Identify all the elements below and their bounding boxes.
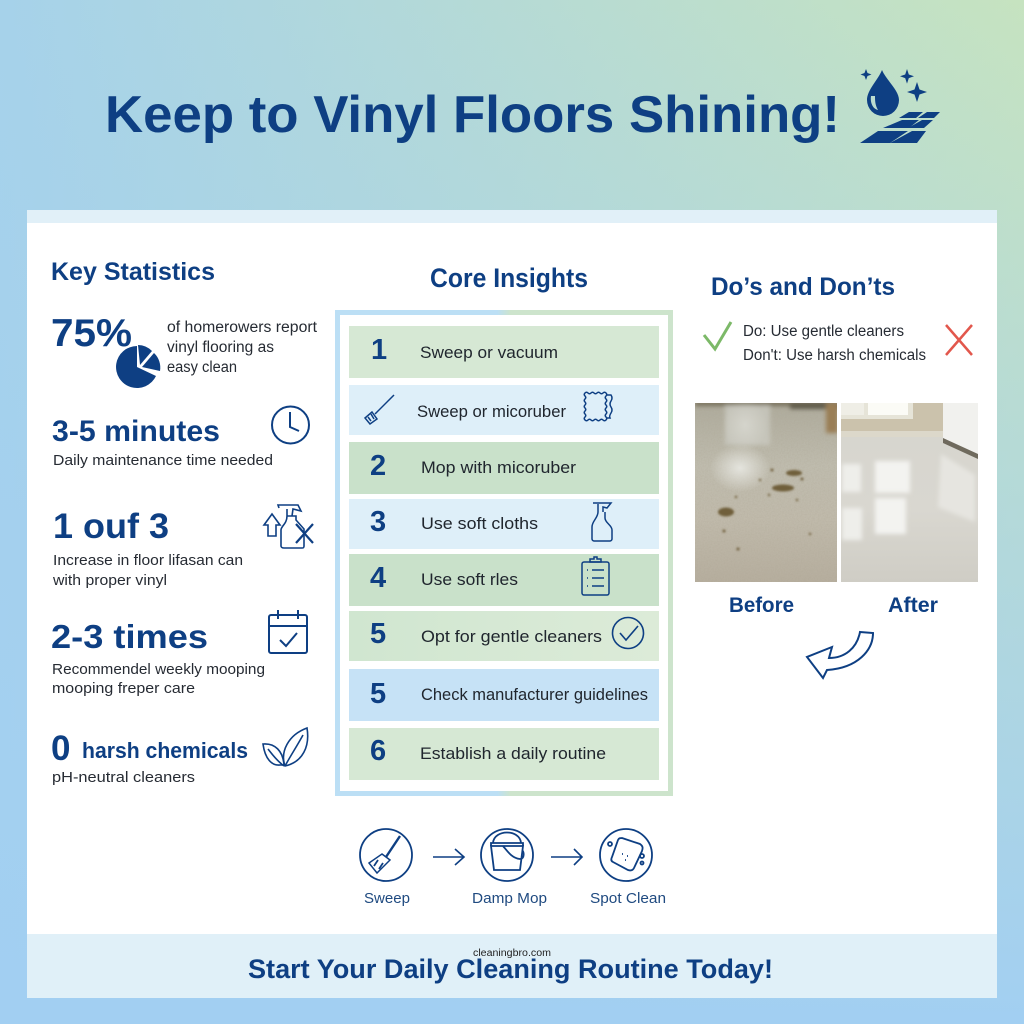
row 4: use soft cloths — [349, 499, 659, 549]
arrow: curved back arrow — [807, 632, 873, 678]
row 8: establish a daily routine — [349, 728, 659, 780]
stat: 0 harsh chemicals: pH-neutral cleaners — [52, 770, 195, 786]
row 3: mop with micoruber: Mop with micoruber — [421, 458, 576, 477]
stat: 75 percent: vinyl flooring as — [167, 339, 274, 356]
photo: before (dirty floor) — [695, 399, 840, 582]
stat: 0 harsh chemicals — [51, 728, 308, 786]
stat: 2-3 times — [51, 610, 307, 697]
icon: green check — [704, 322, 731, 349]
title: Keep to Vinyl Floors Shining! — [105, 86, 840, 144]
stat: 75 percent: 75% — [51, 312, 132, 355]
icon: clock — [272, 406, 309, 444]
row 5: use soft files: Use soft rles — [421, 570, 518, 589]
stat: 3-5 minutes — [52, 406, 309, 469]
stat: 75 percent: easy clean — [167, 359, 237, 376]
stat: 0 harsh chemicals: harsh chemicals — [82, 738, 248, 763]
stat: 2-3 times: mooping freper care — [52, 681, 195, 697]
insights frame — [338, 312, 670, 794]
panel: core insights — [338, 263, 670, 794]
photo: after (shiny floor) — [841, 403, 978, 582]
icon: calendar — [269, 610, 307, 653]
icon: check circle — [612, 618, 644, 648]
process flow — [360, 829, 666, 907]
row 7: check manufacturer guidelines: 5 — [370, 678, 386, 710]
arrow: damp mop to spot clean — [551, 849, 582, 865]
step: damp mop — [472, 829, 547, 907]
stat: 1 of 3: with proper vinyl — [52, 573, 167, 589]
row 4: use soft cloths: Use soft cloths — [421, 514, 538, 533]
stat: 1 of 3: 1 ouf 3 — [53, 507, 169, 546]
row 8: establish a daily routine: 6 — [370, 735, 386, 767]
row 3: mop with micoruber: 2 — [370, 450, 386, 482]
icon: clipboard — [582, 557, 609, 595]
row 7: check manufacturer guidelines: Check manufacturer guidelines — [421, 685, 648, 704]
stat: 3-5 minutes: 3-5 minutes — [52, 415, 220, 448]
icon: water drop with sparkles and floor tiles — [860, 69, 940, 143]
heading: key statistics: Key Statistics — [51, 258, 215, 286]
footer call to action: Start Your Daily Cleaning Routine Today! — [248, 954, 773, 984]
stat: 1 of 3 — [52, 505, 313, 589]
icon: spray bottle — [592, 503, 612, 541]
step: sweep — [360, 829, 412, 907]
do text: Do: Use gentle cleaners — [743, 323, 904, 340]
row 1: sweep or vacuum: Sweep or vacuum — [420, 343, 558, 362]
icon: red cross — [946, 325, 972, 355]
icon: leaves — [263, 728, 308, 766]
stat: 75 percent — [51, 312, 318, 388]
row 5: use soft files — [349, 554, 659, 606]
main white panel — [27, 210, 997, 998]
panel: do's and don'ts — [704, 273, 972, 364]
icon: spray bottle with arrow and cross — [264, 505, 313, 548]
stat: 2-3 times: 2-3 times — [51, 618, 208, 655]
step: sweep: Sweep — [364, 890, 410, 907]
heading: do's and don'ts: Do’s and Don’ts — [711, 273, 895, 301]
label: after: After — [888, 594, 938, 617]
row 7: check manufacturer guidelines — [349, 669, 659, 721]
row 6: opt for gentle cleaners: 5 — [370, 618, 386, 650]
label: before: Before — [729, 594, 794, 617]
footer band — [27, 934, 997, 998]
row 1: sweep or vacuum: 1 — [371, 334, 387, 366]
panel: key statistics — [51, 258, 318, 786]
step: damp mop: Damp Mop — [472, 890, 547, 907]
stat: 3-5 minutes: Daily maintenance time needed — [53, 453, 273, 469]
stat: 2-3 times: Recommendel weekly mooping — [52, 662, 265, 678]
row 6: opt for gentle cleaners — [349, 611, 659, 661]
icon: pie chart — [116, 345, 160, 388]
icon: microfiber cloth — [584, 392, 612, 421]
heading: core insights: Core Insights — [430, 263, 588, 293]
row 1: sweep or vacuum — [349, 326, 659, 378]
stat: 75 percent: of homerowers report — [167, 319, 318, 336]
row 8: establish a daily routine: Establish a daily routine — [420, 744, 606, 763]
stat: 0 harsh chemicals: 0 — [51, 729, 70, 768]
step: spot clean: Spot Clean — [590, 890, 666, 907]
icon: broom — [365, 395, 394, 424]
arrow: sweep to damp mop — [433, 849, 464, 865]
row 4: use soft cloths: 3 — [370, 506, 386, 538]
row 3: mop with micoruber — [349, 442, 659, 494]
step: spot clean — [590, 829, 666, 907]
watermark: cleaningbro.com — [473, 948, 551, 959]
row 6: opt for gentle cleaners: Opt for gentle cleaners — [421, 627, 602, 646]
row 2: sweep or micoruber — [349, 385, 659, 435]
row 5: use soft files: 4 — [370, 562, 386, 594]
don't text: Don't: Use harsh chemicals — [743, 347, 926, 364]
stat: 1 of 3: Increase in floor lifasan can — [53, 553, 243, 569]
row 2: sweep or micoruber: Sweep or micoruber — [417, 402, 566, 421]
